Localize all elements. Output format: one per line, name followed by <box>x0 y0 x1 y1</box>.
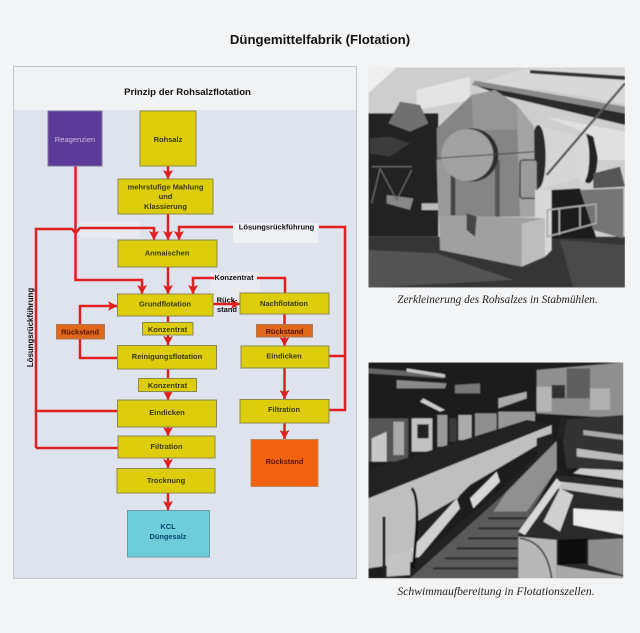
box: Mahlung und Klassierung: mehrstufige Mahlung <box>128 182 204 192</box>
title: Düngemittelfabrik (Flotation) <box>230 32 410 47</box>
label: Rückstand between flotations: Rück- <box>217 296 238 304</box>
box: Konzentrat lower: Konzentrat <box>148 381 188 390</box>
box: Rückstand left <box>56 324 104 339</box>
box: Eindicken right: Eindicken <box>266 352 302 360</box>
box: Konzentrat upper <box>142 322 193 335</box>
box: Reinigungsflotation: Reinigungsflotation <box>132 352 203 361</box>
box: Mahlung und Klassierung <box>118 179 213 214</box>
box: Anmaischen <box>118 240 217 267</box>
box: Rohsalz: Rohsalz <box>154 135 183 144</box>
box: Grundflotation: Grundflotation <box>139 300 191 308</box>
box: Eindicken left <box>118 400 216 427</box>
label: Lösungsrückführung vertical: Lösungsrückführung <box>26 288 35 367</box>
box: Reagenzien: Reagenzien <box>55 135 95 144</box>
box: Rückstand right <box>256 324 312 337</box>
label: Rückstand between flotations <box>217 296 238 314</box>
label: Konzentrat: Konzentrat <box>214 273 254 282</box>
box: Filtration left: Filtration <box>150 442 183 451</box>
box: Rückstand large <box>251 440 318 486</box>
box: Rückstand right: Rückstand <box>266 327 304 336</box>
box: KCL Düngesalz: KCL <box>160 522 176 531</box>
box: KCL Düngesalz: Düngesalz <box>150 532 187 541</box>
box: Reinigungsflotation <box>118 346 216 369</box>
panel: flotation flowchart <box>14 66 356 578</box>
box: Reagenzien <box>48 111 102 166</box>
box: Anmaischen: Anmaischen <box>145 248 190 258</box>
box: Eindicken left: Eindicken <box>149 408 185 417</box>
box: Trocknung: Trocknung <box>147 476 186 485</box>
box: Mahlung und Klassierung: Klassierung <box>144 202 187 211</box>
caption: rod mills: Zerkleinerung des Rohsalzes in Stabmühlen. <box>397 294 598 306</box>
label: Rückstand between flotations: stand <box>217 305 237 314</box>
box: Nachflotation <box>240 293 329 314</box>
box: Trocknung <box>117 468 215 493</box>
box: Rohsalz <box>140 111 196 166</box>
photo: rod mills <box>368 67 625 288</box>
box: Rückstand large: Rückstand <box>266 457 304 466</box>
chart heading: Prinzip der Rohsalzflotation <box>124 87 251 98</box>
photo: flotation cells <box>368 362 623 578</box>
caption: flotation cells: Schwimmaufbereitung in Flotationszellen. <box>397 585 595 598</box>
box: Nachflotation: Nachflotation <box>260 299 308 308</box>
box: Eindicken right <box>241 346 329 368</box>
box: Konzentrat lower <box>138 378 196 392</box>
box: Filtration right: Filtration <box>268 405 300 414</box>
box: Filtration left <box>118 436 215 458</box>
label: Lösungsrückführung horizontal: Lösungsrückführung <box>239 222 315 232</box>
box: Rückstand left: Rückstand <box>61 328 99 336</box>
box: Filtration right <box>240 400 329 423</box>
flow arrows <box>36 166 345 510</box>
box: KCL Düngesalz <box>128 510 210 557</box>
box: Konzentrat upper: Konzentrat <box>148 325 188 334</box>
box: Mahlung und Klassierung: und <box>159 192 173 201</box>
box: Grundflotation <box>118 294 213 316</box>
